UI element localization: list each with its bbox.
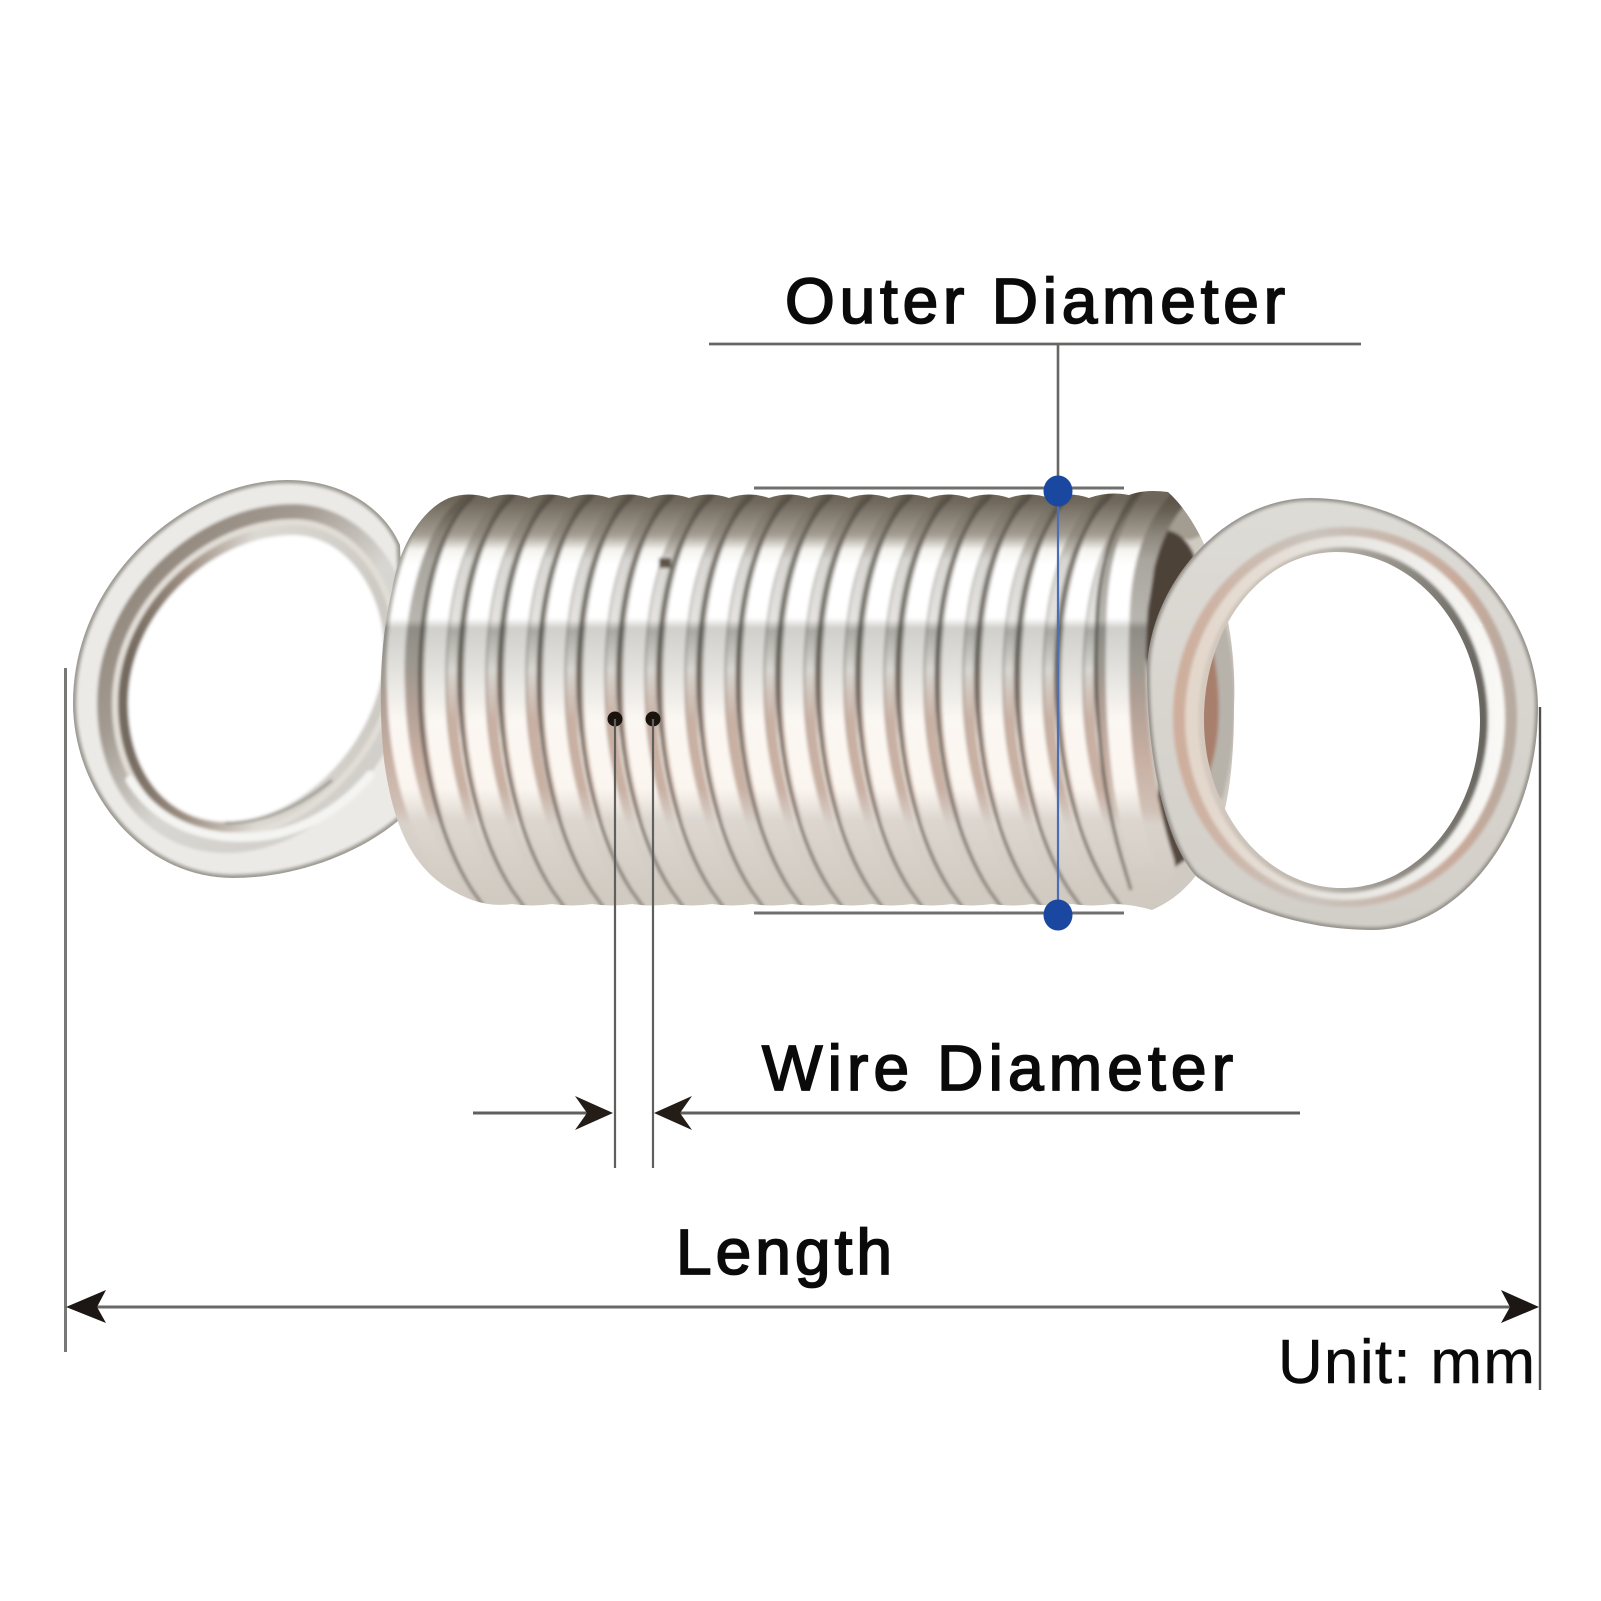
label rule	[709, 343, 1361, 345]
coil body	[370, 480, 1250, 920]
first coil	[401, 482, 490, 915]
left hook ring	[73, 480, 400, 878]
heading: Wire Diameter: Wire Diameter	[762, 1032, 1233, 1104]
right extension line	[1539, 707, 1541, 1390]
outer diameter callout	[709, 265, 1361, 930]
large end coil	[1096, 482, 1172, 890]
double-headed length arrow	[66, 1290, 1539, 1323]
wire diameter callout	[473, 712, 1300, 1168]
infographic: extension spring dimension diagram	[64, 276, 1542, 1390]
strand end detail	[1440, 580, 1481, 626]
right extension line	[652, 719, 654, 1168]
dark coil interior	[1143, 530, 1198, 680]
base fill	[380, 656, 427, 871]
left extension line	[64, 668, 67, 1352]
back coil	[1210, 626, 1234, 799]
coil turns	[420, 482, 1165, 915]
heading: Length: Length	[676, 1216, 892, 1288]
diameter span line	[1057, 490, 1059, 915]
leader line	[1057, 344, 1059, 490]
heading: Outer Diameter: Outer Diameter	[785, 265, 1285, 337]
left extension line	[614, 719, 616, 1168]
top extent line	[754, 486, 1124, 490]
spring photo	[60, 470, 1550, 940]
right hook ring	[1147, 498, 1538, 930]
left wire marker dot	[608, 712, 622, 726]
surface specks	[659, 558, 671, 568]
length callout	[66, 668, 1540, 1397]
right end of the coil	[1144, 534, 1234, 907]
bottom blue marker	[1044, 900, 1072, 930]
right arrow	[654, 1096, 1300, 1130]
top of end coil	[1167, 506, 1200, 541]
left arrow	[473, 1096, 613, 1130]
top blue marker	[1044, 476, 1072, 506]
right wire marker dot	[646, 712, 660, 726]
bottom extent line	[754, 912, 1124, 914]
unit note: Unit: mm	[1278, 1328, 1535, 1397]
